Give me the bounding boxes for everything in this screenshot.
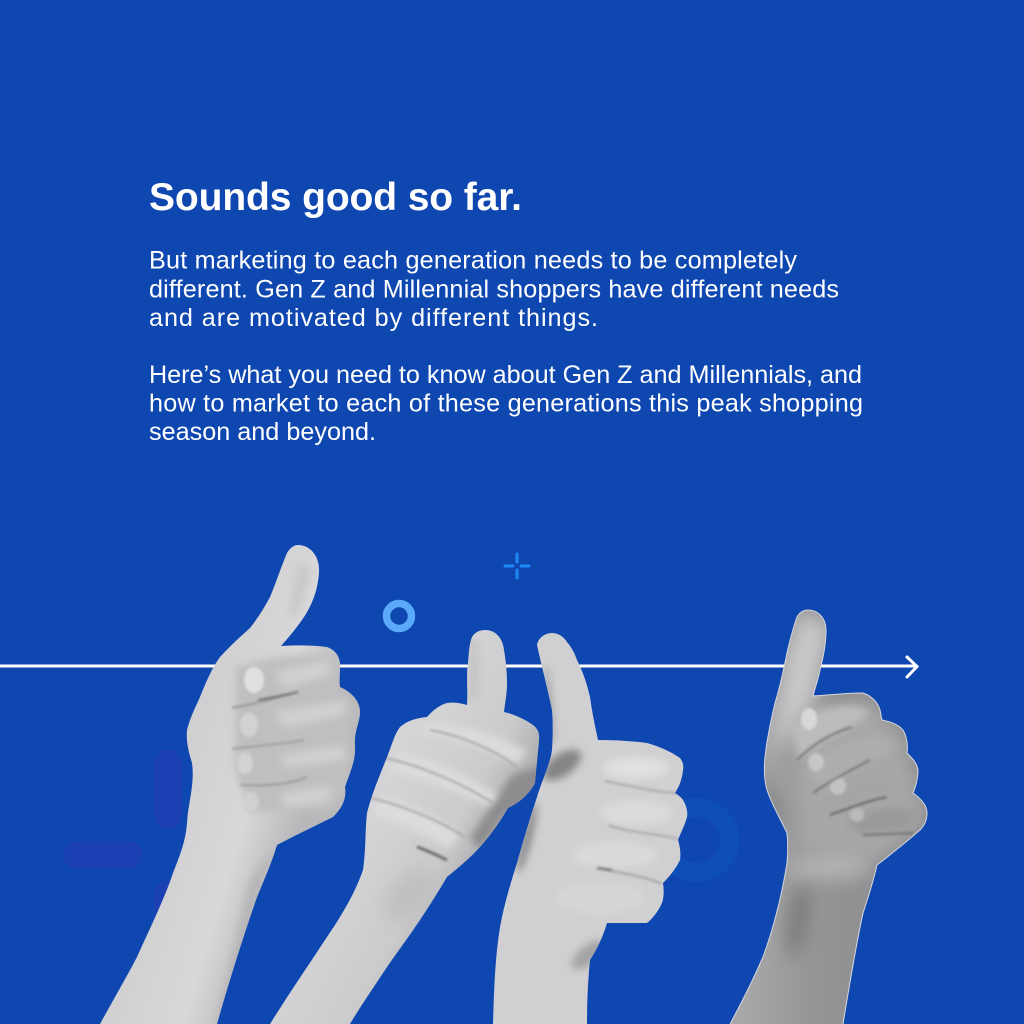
decorative faint shapes	[63, 749, 730, 960]
text block: second paragraph: season and beyond.	[149, 418, 376, 446]
hand 4	[725, 605, 935, 1024]
text block: second paragraph: Here’s what you need to know about Gen Z and Millennials, and	[149, 361, 862, 389]
text block: second paragraph: how to market to each of these generations this peak shopping	[149, 390, 863, 418]
text block: second paragraph	[149, 361, 863, 446]
text block: first paragraph: But marketing to each generation needs to be completely	[149, 246, 797, 274]
text block: first paragraph: and are motivated by different things.	[149, 304, 598, 332]
icon: crosshair	[505, 554, 529, 578]
title: Sounds good so far.	[149, 176, 522, 219]
hand 1	[90, 540, 370, 1024]
hand 3	[485, 625, 695, 1024]
icon: light blue ring	[386, 604, 412, 628]
hand 2	[260, 625, 550, 1024]
arrow	[0, 657, 917, 677]
text block: first paragraph: different. Gen Z and Millennial shoppers have different needs	[149, 276, 839, 304]
text block: first paragraph	[149, 246, 839, 332]
